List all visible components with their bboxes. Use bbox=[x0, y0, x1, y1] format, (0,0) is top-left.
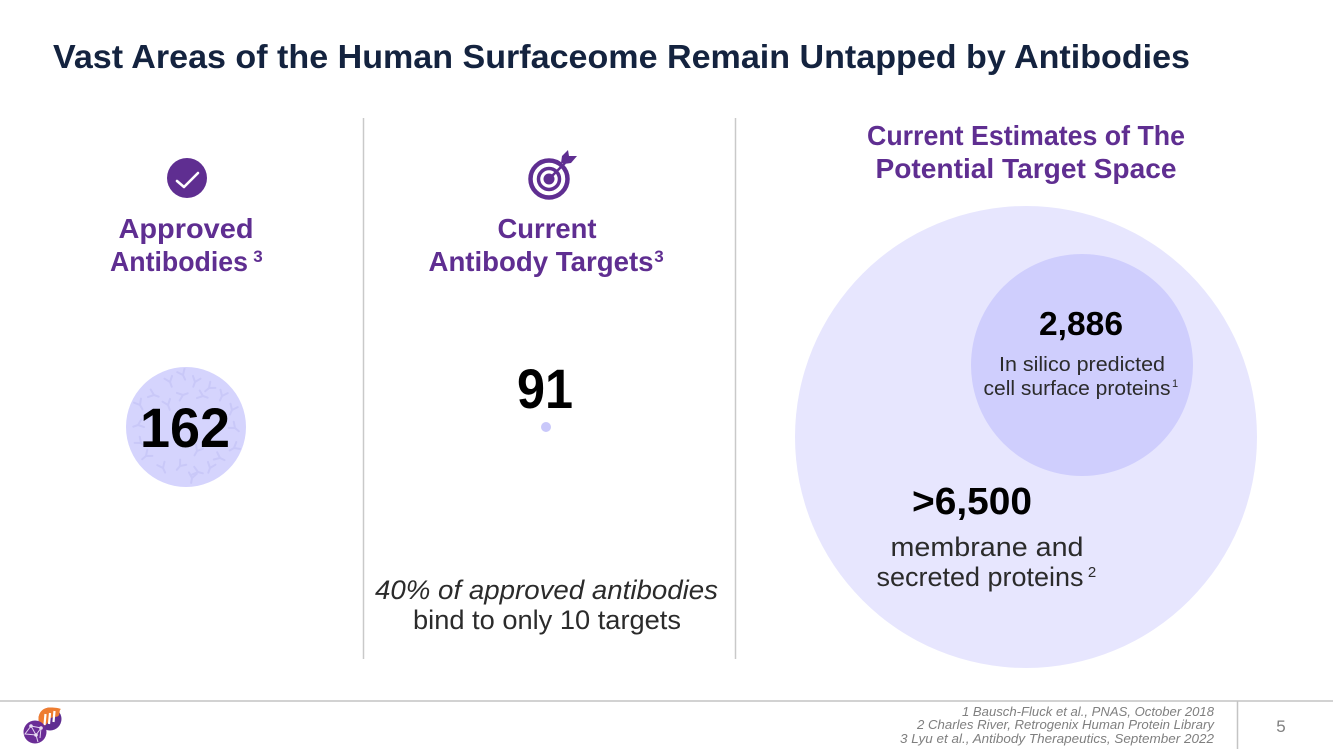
note: target concentration: 40% of approved antibodies bbox=[375, 575, 718, 605]
page number: 5 bbox=[1276, 717, 1286, 736]
references: 1 Bausch-Fluck et al., PNAS, October 2018 bbox=[962, 705, 1214, 719]
heading: approved antibodies bbox=[110, 213, 263, 277]
logo bbox=[24, 708, 62, 744]
outer circle: membrane and secreted proteins: secreted proteins bbox=[876, 562, 1084, 592]
inner circle: in silico predicted proteins bbox=[971, 254, 1193, 476]
heading: potential target space bbox=[867, 120, 1185, 184]
references: 2 Charles River, Retrogenix Human Protein Library bbox=[916, 718, 1215, 732]
panel: current antibody targets bbox=[375, 150, 718, 635]
inner circle: in silico predicted proteins: cell surface proteins bbox=[984, 378, 1170, 400]
icon: check mark badge bbox=[167, 158, 207, 198]
heading: current antibody targets: Antibody Targets bbox=[428, 246, 654, 277]
outer circle: membrane and secreted proteins: >6,500 bbox=[912, 481, 1032, 523]
heading: potential target space: Current Estimates of The bbox=[867, 120, 1185, 151]
inner circle: in silico predicted proteins: 2,886 bbox=[1039, 305, 1123, 342]
note: target concentration bbox=[375, 575, 718, 635]
inner circle: in silico predicted proteins: 1 bbox=[1172, 378, 1178, 390]
title: Vast Areas of the Human Surfaceome Remain Untapped by Antibodies bbox=[53, 38, 1190, 75]
heading: approved antibodies: Antibodies bbox=[110, 246, 248, 277]
heading: current antibody targets: Current bbox=[498, 213, 596, 244]
footer bbox=[0, 701, 1333, 749]
panel: approved antibodies bbox=[110, 158, 263, 487]
heading: potential target space: Potential Target Space bbox=[876, 153, 1176, 184]
stat: 162 in antibody circle bbox=[126, 367, 246, 487]
inner circle: in silico predicted proteins: In silico predicted bbox=[999, 354, 1165, 376]
heading: current antibody targets bbox=[428, 213, 664, 277]
outer circle: membrane and secreted proteins bbox=[795, 206, 1257, 668]
heading: approved antibodies: Approved bbox=[118, 213, 254, 244]
stat: 91: 91 bbox=[517, 357, 573, 420]
stat: 162 in antibody circle: 162 bbox=[140, 396, 230, 459]
outer circle: membrane and secreted proteins: 2 bbox=[1088, 564, 1096, 581]
heading: approved antibodies: 3 bbox=[253, 247, 263, 266]
note: target concentration: bind to only 10 targets bbox=[413, 605, 681, 635]
heading: current antibody targets: 3 bbox=[654, 247, 664, 266]
dot: proportional marker bbox=[541, 422, 551, 432]
icon: target with arrow bbox=[530, 150, 577, 198]
outer circle: membrane and secreted proteins: membrane and bbox=[890, 532, 1084, 562]
references bbox=[900, 705, 1215, 746]
references: 3 Lyu et al., Antibody Therapeutics, September 2022 bbox=[900, 732, 1214, 746]
panel: potential target space bbox=[795, 120, 1257, 668]
